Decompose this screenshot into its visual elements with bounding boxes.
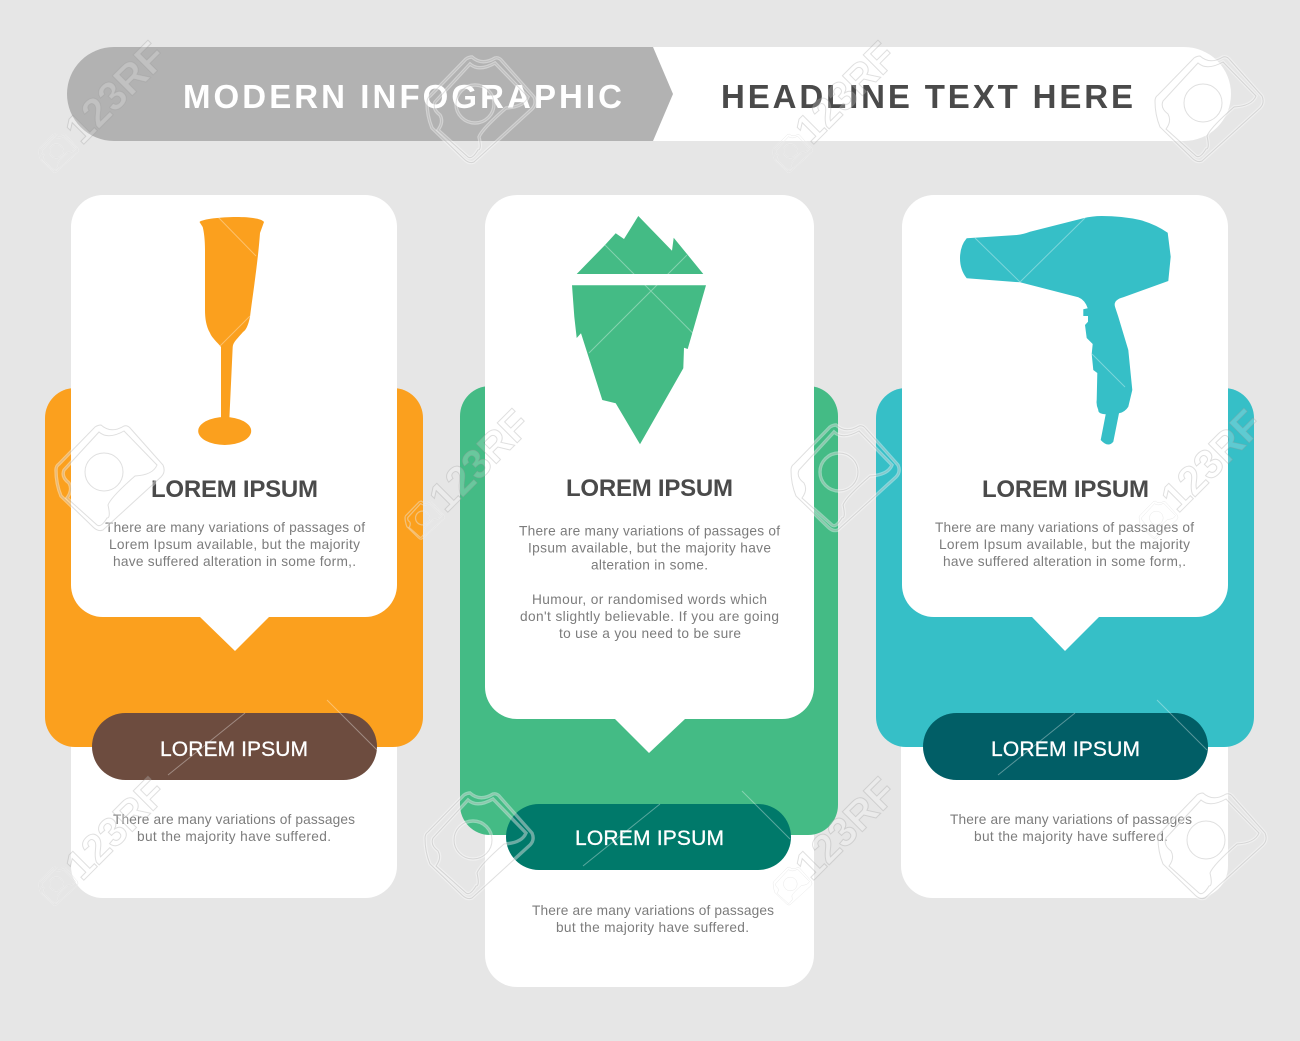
lower text: There are many variations of passages bbox=[113, 812, 355, 827]
heading: LOREM IPSUM bbox=[982, 476, 1149, 503]
green backing panel bbox=[460, 386, 838, 835]
stock watermark overlay: 123RF bbox=[420, 401, 539, 520]
lower white card bbox=[485, 790, 814, 987]
panel: left column (orange) bbox=[45, 195, 423, 898]
header gray arrow segment bbox=[67, 47, 673, 141]
header white segment bbox=[640, 47, 1231, 141]
body text: to use a you need to be sure bbox=[559, 626, 741, 641]
icon: champagne flute bbox=[198, 217, 264, 445]
stock watermark overlay bbox=[39, 33, 1271, 905]
body text: There are many variations of passages of bbox=[105, 520, 365, 535]
body text: don't slightly believable. If you are going bbox=[520, 609, 779, 624]
body text: There are many variations of passages of bbox=[935, 520, 1194, 535]
lower text: but the majority have suffered. bbox=[974, 829, 1168, 844]
lower text: There are many variations of passages bbox=[950, 812, 1192, 827]
header title left: MODERN INFOGRAPHIC bbox=[183, 78, 622, 115]
panel: middle column (green) bbox=[460, 195, 838, 987]
pill button: LOREM IPSUM bbox=[575, 827, 724, 850]
lower text bbox=[113, 812, 355, 844]
stock watermark overlay: 123RF bbox=[56, 769, 175, 888]
pill button bbox=[92, 713, 377, 780]
body text bbox=[519, 524, 780, 641]
pill button: LOREM IPSUM bbox=[991, 738, 1140, 761]
header banner bbox=[67, 47, 1231, 141]
body text: Lorem Ipsum available, but the majority bbox=[109, 537, 360, 552]
stock watermark overlay: 123RF bbox=[786, 769, 905, 888]
heading: LOREM IPSUM bbox=[566, 475, 733, 502]
pill button bbox=[923, 713, 1208, 780]
pill button: LOREM IPSUM bbox=[160, 738, 308, 761]
stock watermark overlay: 123RF bbox=[786, 33, 905, 152]
icon: hair dryer bbox=[960, 216, 1171, 444]
lower white card bbox=[901, 700, 1228, 898]
lower text bbox=[532, 903, 774, 935]
lower text: There are many variations of passages bbox=[532, 903, 774, 918]
header title right: HEADLINE TEXT HERE bbox=[721, 78, 1133, 115]
body text bbox=[935, 520, 1194, 569]
lower text: but the majority have suffered. bbox=[556, 920, 749, 935]
upper white card with pointer bbox=[902, 195, 1228, 651]
body text: have suffered alteration in some form,. bbox=[113, 554, 356, 569]
stock watermark overlay: 123RF bbox=[56, 33, 175, 152]
body text: Ipsum available, but the majority have bbox=[528, 540, 771, 556]
lower text: but the majority have suffered. bbox=[137, 829, 331, 844]
stock watermark overlay: 123RF bbox=[1152, 401, 1271, 520]
teal backing panel bbox=[876, 388, 1254, 747]
panel: right column (teal) bbox=[876, 195, 1254, 898]
body text: Humour, or randomised words which bbox=[532, 592, 767, 607]
upper white card with pointer bbox=[485, 195, 814, 753]
body text bbox=[105, 520, 365, 569]
upper white card with pointer bbox=[71, 195, 397, 651]
heading: LOREM IPSUM bbox=[151, 476, 318, 503]
lower text bbox=[950, 812, 1192, 844]
body text: alteration in some. bbox=[591, 558, 708, 572]
body text: Lorem Ipsum available, but the majority bbox=[939, 537, 1190, 552]
pill button bbox=[506, 804, 791, 870]
body text: have suffered alteration in some form,. bbox=[943, 554, 1186, 569]
icon: iceberg bbox=[572, 216, 706, 444]
orange backing panel bbox=[45, 388, 423, 747]
lower white card bbox=[71, 700, 397, 898]
body text: There are many variations of passages of bbox=[519, 524, 780, 538]
